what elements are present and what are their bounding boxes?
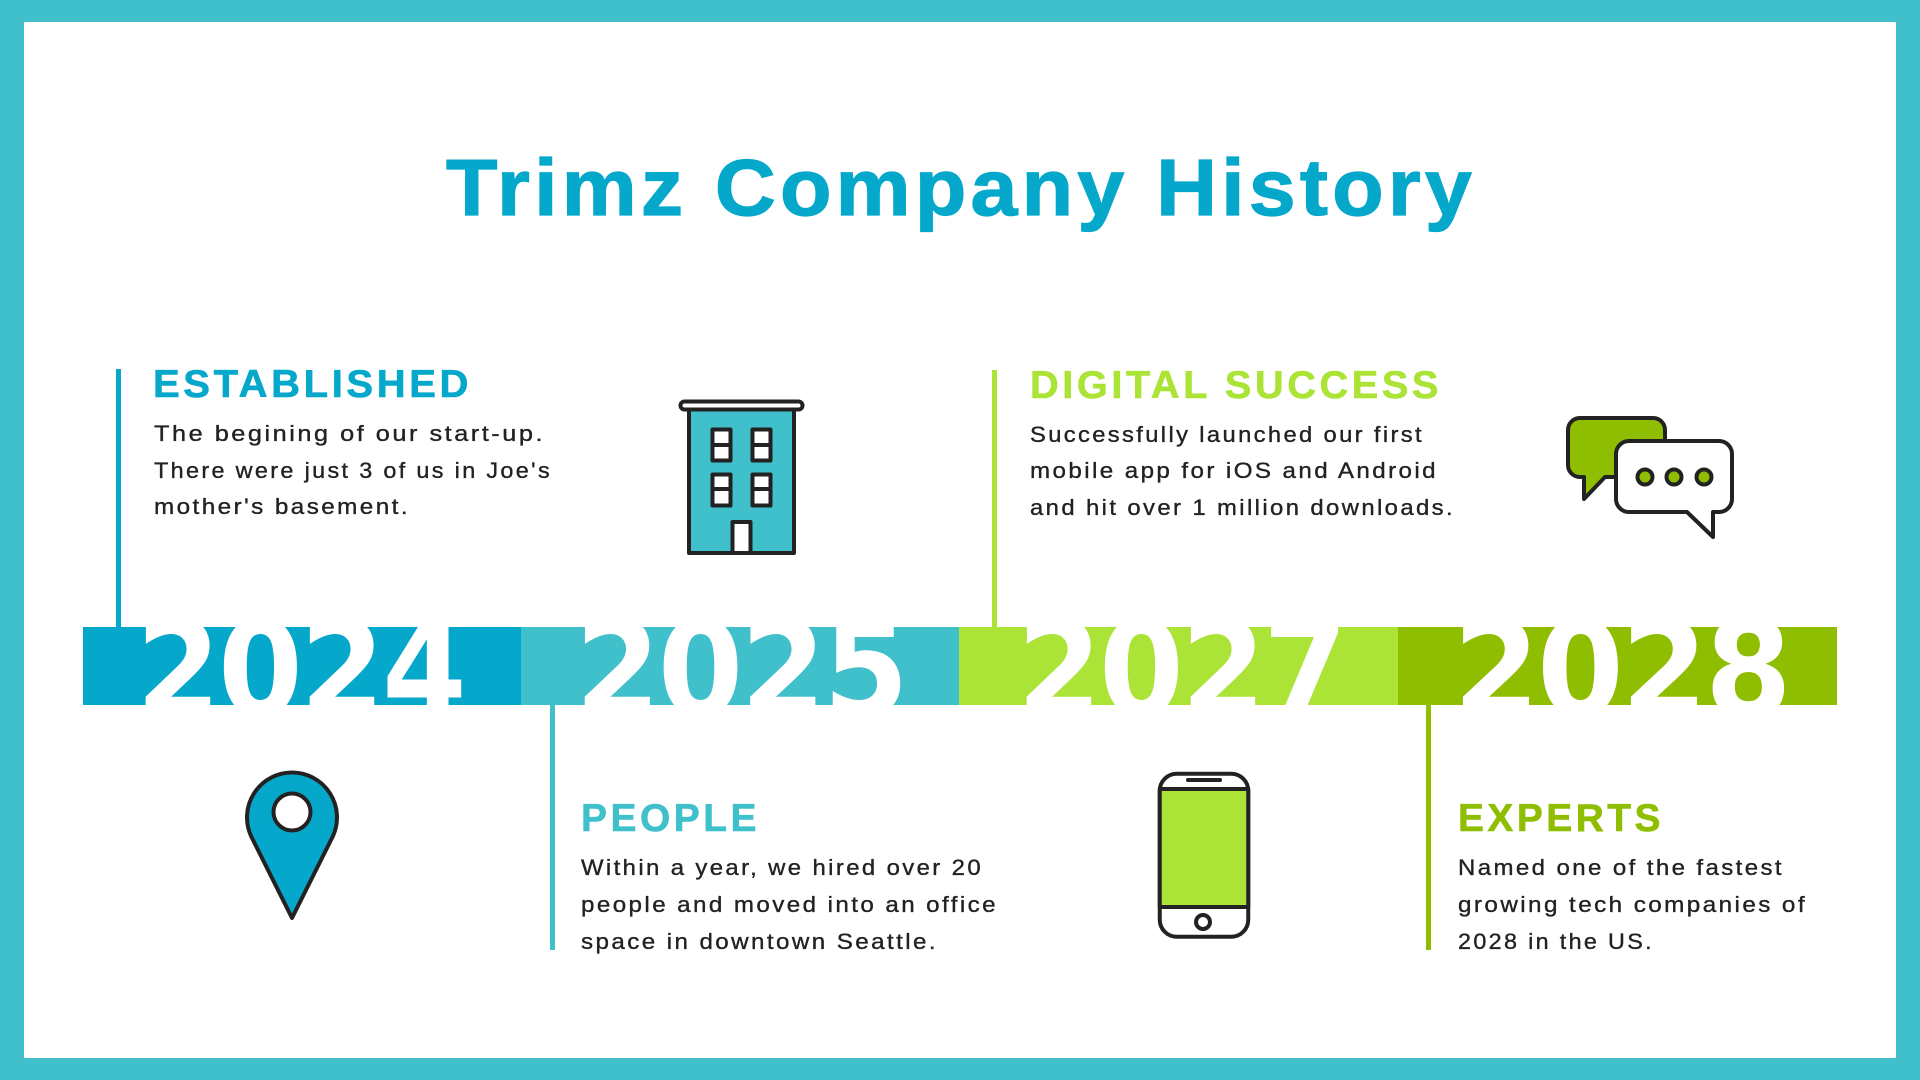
heading: people: PEOPLE [581, 797, 760, 840]
panel: experts 2028 [1426, 705, 1807, 954]
segment: 2024: 2024 [136, 593, 464, 747]
icon: smartphone [1160, 774, 1248, 937]
panel: established 2024 [116, 363, 552, 627]
text: digital success description: and hit over 1 million downloads. [1030, 495, 1455, 520]
text: experts description: Named one of the fastest [1458, 855, 1784, 880]
icon: building [680, 402, 802, 553]
text: experts description [1458, 855, 1807, 954]
connector line: digital success [992, 370, 997, 627]
segment: 2027: 2027 [1017, 593, 1345, 747]
connector line: established [116, 369, 121, 627]
text: people description: Within a year, we hired over 20 [581, 855, 983, 880]
heading: experts: EXPERTS [1458, 797, 1664, 840]
text: digital success description [1030, 422, 1455, 520]
timeline bar [83, 593, 1837, 747]
segment: 2025: 2025 [575, 593, 906, 747]
text: experts description: growing tech companies of [1458, 892, 1807, 917]
text: established description: The begining of our start-up. [154, 421, 545, 446]
text: experts description: 2028 in the US. [1458, 929, 1654, 954]
text: people description: people and moved into an office [581, 892, 998, 917]
text: established description: There were just 3 of us in Joe's [154, 458, 552, 483]
text: digital success description: mobile app for iOS and Android [1030, 458, 1438, 483]
text: people description [581, 855, 998, 954]
text: people description: space in downtown Seattle. [581, 929, 938, 954]
icon: location pin [247, 772, 337, 918]
panel: digital success 2027 [992, 364, 1455, 627]
text: established description: mother's basement. [154, 494, 410, 519]
segment: 2028: 2028 [1453, 593, 1789, 747]
icon: chat bubbles [1568, 418, 1732, 537]
title: Trimz Company History [446, 143, 1476, 232]
connector line: people [550, 705, 555, 950]
heading: established: ESTABLISHED [153, 363, 472, 406]
heading: digital success: DIGITAL SUCCESS [1030, 364, 1442, 407]
panel: people 2025 [550, 705, 998, 954]
text: digital success description: Successfully launched our first [1030, 422, 1424, 447]
text: established description [154, 421, 552, 519]
connector line: experts [1426, 705, 1431, 950]
